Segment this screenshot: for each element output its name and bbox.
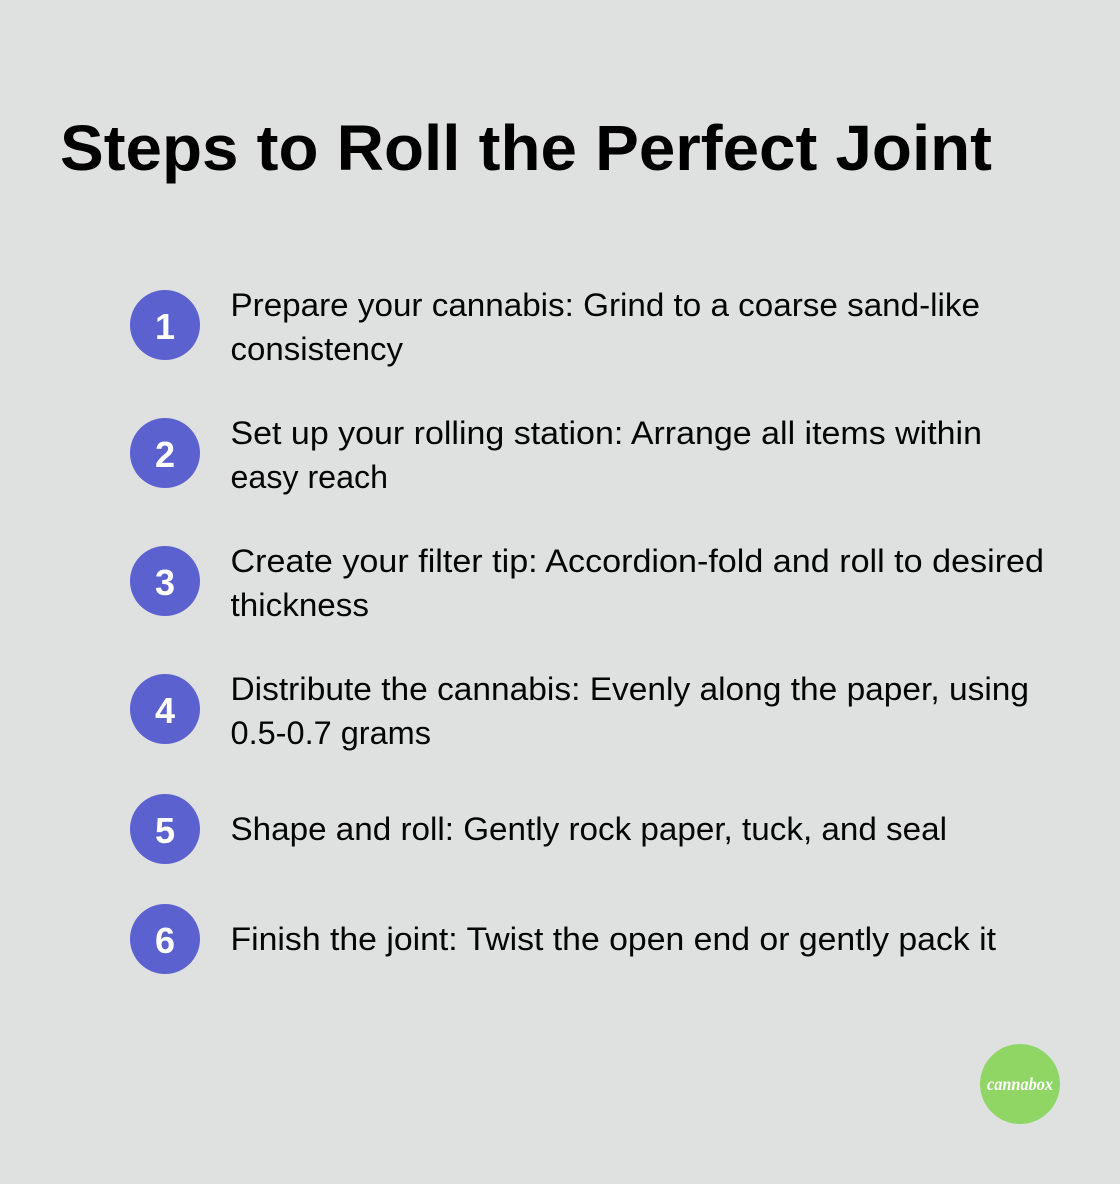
step 3 number badge: 3 (155, 562, 175, 603)
step 1 text: consistency (230, 331, 403, 367)
step 4 text: Distribute the cannabis: Evenly along the paper, using (230, 671, 1029, 707)
step 3 text (230, 543, 1044, 623)
logo: cannabox (980, 1044, 1060, 1124)
step 5 text: Shape and roll: Gently rock paper, tuck, and seal (230, 811, 947, 847)
step 2 text: easy reach (230, 459, 388, 495)
step 3 number badge (130, 546, 200, 616)
step 2 (130, 415, 982, 495)
step 5 number badge (130, 794, 200, 864)
step 1 (130, 287, 980, 367)
step 4 number badge: 4 (155, 690, 175, 731)
title: Steps to Roll the Perfect Joint (60, 112, 992, 184)
step 2 number badge: 2 (155, 434, 175, 475)
step 3 (130, 543, 1044, 623)
step 4 text: 0.5-0.7 grams (230, 715, 431, 751)
step 6 number badge (130, 904, 200, 974)
step 1 number badge: 1 (155, 306, 175, 347)
step 5 (130, 794, 947, 864)
step 3 text: Create your filter tip: Accordion-fold and roll to desired (230, 543, 1044, 579)
logo: cannabox: cannabox (987, 1074, 1053, 1094)
step 4 (130, 671, 1029, 751)
step 4 number badge (130, 674, 200, 744)
step 6 text: Finish the joint: Twist the open end or gently pack it (230, 921, 996, 957)
step 2 text: Set up your rolling station: Arrange all items within (230, 415, 982, 451)
step 2 number badge (130, 418, 200, 488)
step 5 number badge: 5 (155, 810, 175, 851)
step 2 text (230, 415, 982, 495)
step 3 text: thickness (230, 587, 369, 623)
step 4 text (230, 671, 1029, 751)
step 1 number badge (130, 290, 200, 360)
step 1 text: Prepare your cannabis: Grind to a coarse sand-like (230, 287, 980, 323)
step 6 (130, 904, 996, 974)
step 1 text (230, 287, 980, 367)
step 6 number badge: 6 (155, 920, 175, 961)
